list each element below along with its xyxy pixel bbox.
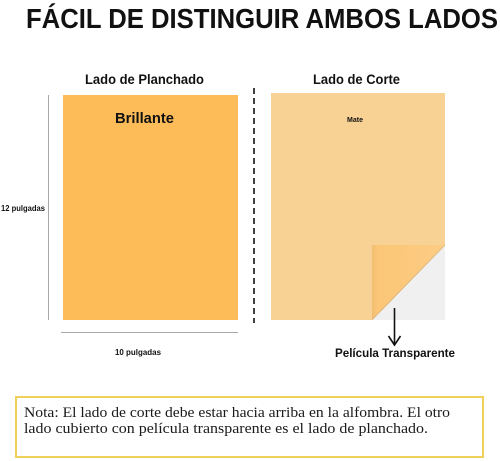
- peel edge shadow: [372, 245, 445, 320]
- label: transparent film: Película Transparente: [335, 346, 455, 360]
- arrow to film: [388, 308, 400, 345]
- peeled corner: [372, 245, 445, 320]
- heading: ironing side: Lado de Planchado: [85, 72, 204, 87]
- divider: dashed line: [253, 88, 255, 323]
- width dimension line: [61, 332, 238, 334]
- note text: [24, 405, 450, 437]
- callout: note: [16, 397, 483, 457]
- panel: glossy ironing side: [63, 95, 238, 320]
- note text: lado cubierto con película transparente es el lado de planchado.: [24, 421, 428, 437]
- width label: 10 pulgadas: [115, 347, 161, 357]
- heading: cutting side: Lado de Corte: [313, 72, 400, 87]
- transparent film corner: [372, 245, 445, 320]
- height dimension line: [48, 95, 50, 320]
- label: matte: Mate: [347, 115, 363, 124]
- height label: 12 pulgadas: [1, 203, 45, 213]
- panel: matte cutting side: [271, 93, 445, 320]
- note text: Nota: El lado de corte debe estar hacia arriba en la alfombra. El otro: [24, 405, 450, 421]
- label: glossy: Brillante: [115, 110, 174, 127]
